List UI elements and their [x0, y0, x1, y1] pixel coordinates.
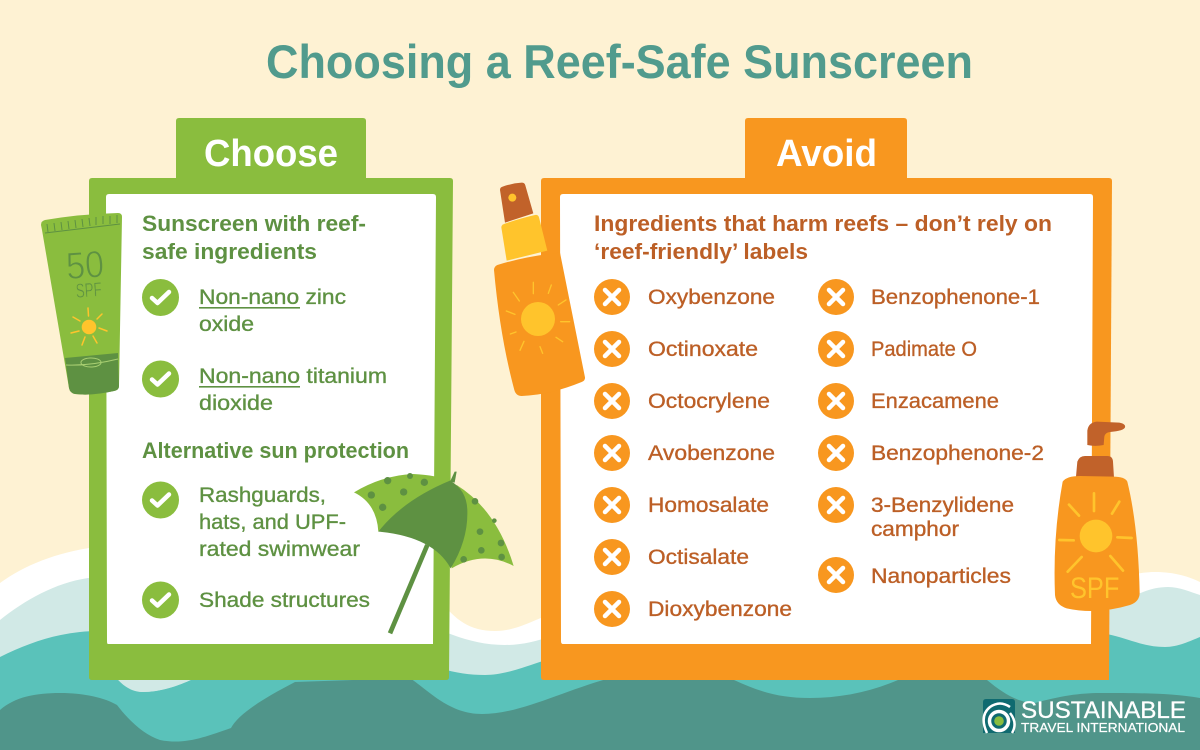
panel: choose: [89, 118, 453, 680]
list: column 1: Octisalate: [648, 546, 749, 569]
list: column 2: Nanoparticles: [871, 565, 1011, 588]
list: column 2: camphor: [871, 518, 959, 541]
list: column 2: Padimate O: [871, 338, 977, 361]
icon: umbrella: [354, 472, 514, 633]
list: column 1: Dioxybenzone: [648, 598, 792, 621]
item: rashguards: Rashguards,: [199, 484, 326, 507]
logo: sustainable travel international: [983, 697, 1186, 735]
item: rashguards: hats, and UPF-: [199, 511, 346, 534]
icon: green sunscreen tube: [41, 213, 122, 395]
text: SPF: SPF: [1070, 572, 1119, 605]
tab: avoid: [745, 118, 907, 178]
title: Choosing a Reef-Safe Sunscreen: [266, 35, 973, 88]
list: column 1: Homosalate: [648, 494, 769, 517]
heading: reef-safe ingredients: Sunscreen with reef-: [142, 211, 366, 236]
heading: alternative protection: Alternative sun protection: [142, 438, 409, 463]
logo mark: [983, 699, 1015, 733]
list: column 2: Enzacamene: [871, 390, 999, 413]
tab: choose: Choose: [204, 133, 338, 175]
list: column 1: Oxybenzone: [648, 286, 775, 309]
white card: [106, 194, 436, 644]
heading: harmful ingredients: Ingredients that harm reefs – don’t rely on: [594, 211, 1052, 236]
heading: harmful ingredients: [594, 211, 1052, 264]
text: 50 SPF: 50: [65, 244, 105, 288]
item: rashguards: [142, 482, 360, 561]
item: rashguards: rated swimwear: [199, 538, 360, 561]
green frame: [89, 178, 453, 680]
tab: choose: [176, 118, 366, 178]
item: zinc oxide: oxide: [199, 313, 254, 336]
icon: spray bottle: [494, 183, 585, 396]
logo: sustainable travel international: SUSTAINABLE: [1021, 697, 1186, 724]
list: column 1: Avobenzone: [648, 442, 775, 465]
logo: sustainable travel international: TRAVEL INTERNATIONAL: [1021, 721, 1185, 735]
icon: pump bottle: [1055, 422, 1140, 611]
tab: avoid: Avoid: [776, 133, 877, 175]
text: 50 SPF: SPF: [75, 279, 103, 303]
item: titanium dioxide: [142, 360, 387, 415]
heading: reef-safe ingredients: safe ingredients: [142, 239, 317, 264]
list: column 2: Benzophenone-2: [871, 442, 1044, 465]
panel: avoid: [541, 118, 1112, 680]
item: titanium dioxide: Non-nano titanium: [199, 365, 387, 388]
item: zinc oxide: Non-nano zinc: [199, 286, 346, 309]
list: column 2: Benzophenone-1: [871, 286, 1040, 309]
heading: harmful ingredients: ‘reef-friendly’ labels: [594, 239, 808, 264]
list: column 1: Octocrylene: [648, 390, 770, 413]
list: column 2: [818, 279, 1044, 593]
item: shade structures: [142, 582, 370, 618]
white card: [560, 194, 1093, 644]
item: shade structures: Shade structures: [199, 589, 370, 612]
waves: [0, 547, 1200, 750]
item: titanium dioxide: dioxide: [199, 392, 273, 415]
list: column 2: 3-Benzylidene: [871, 494, 1014, 517]
orange frame: [541, 178, 1112, 680]
item: zinc oxide: [142, 279, 346, 336]
heading: reef-safe ingredients: [142, 211, 366, 264]
list: column 1: Octinoxate: [648, 338, 758, 361]
list: column 1: [594, 279, 792, 627]
